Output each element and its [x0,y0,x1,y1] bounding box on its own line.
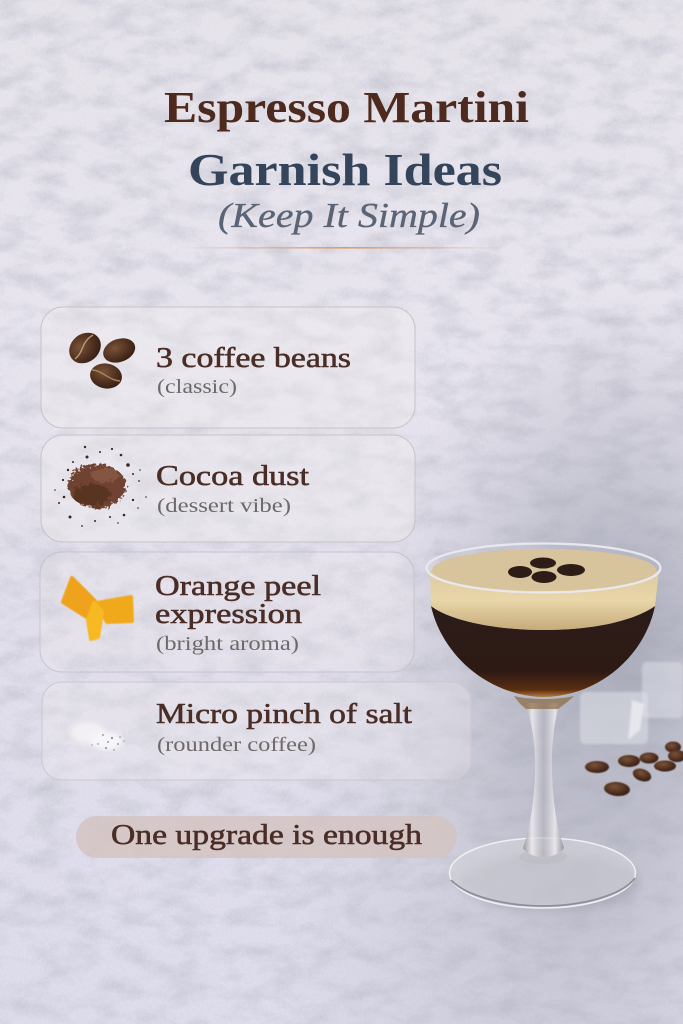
bowl base [514,696,574,709]
glass foot [450,838,640,910]
note: (classic) [157,376,237,398]
label: Micro pinch of salt [156,699,412,730]
glass stem [523,703,564,857]
title divider [180,247,510,249]
panel: cocoa dust [41,435,415,542]
glass rim [426,544,660,592]
scattered coffee beans [585,742,683,797]
panel: coffee beans [41,307,415,428]
callout text: One upgrade is enough [111,820,422,851]
callout pill [76,816,457,858]
label: Orange peel [155,571,321,602]
label: Cocoa dust [156,461,309,492]
panel: orange peel [40,552,414,672]
icon: orange peel twist [63,578,132,639]
ice cubes [580,662,683,744]
icon: three coffee beans [63,326,139,391]
bowl coffee [431,606,655,697]
label line 2: expression [155,599,302,630]
martini glass [426,544,660,910]
foam side [430,570,659,630]
note: (rounder coffee) [157,734,316,756]
title block [164,83,529,235]
foam top [432,549,656,591]
note: (bright aroma) [156,633,299,655]
label: 3 coffee beans [156,343,351,374]
note: (dessert vibe) [157,495,291,517]
title line 1: Espresso Martini [164,83,529,132]
icon: pinch of salt [70,722,125,751]
panel: salt [42,682,471,780]
title line 2: Garnish Ideas [188,144,502,195]
subtitle: (Keep It Simple) [218,196,480,235]
foam beans [508,558,585,583]
icon: cocoa powder pile [54,446,147,527]
